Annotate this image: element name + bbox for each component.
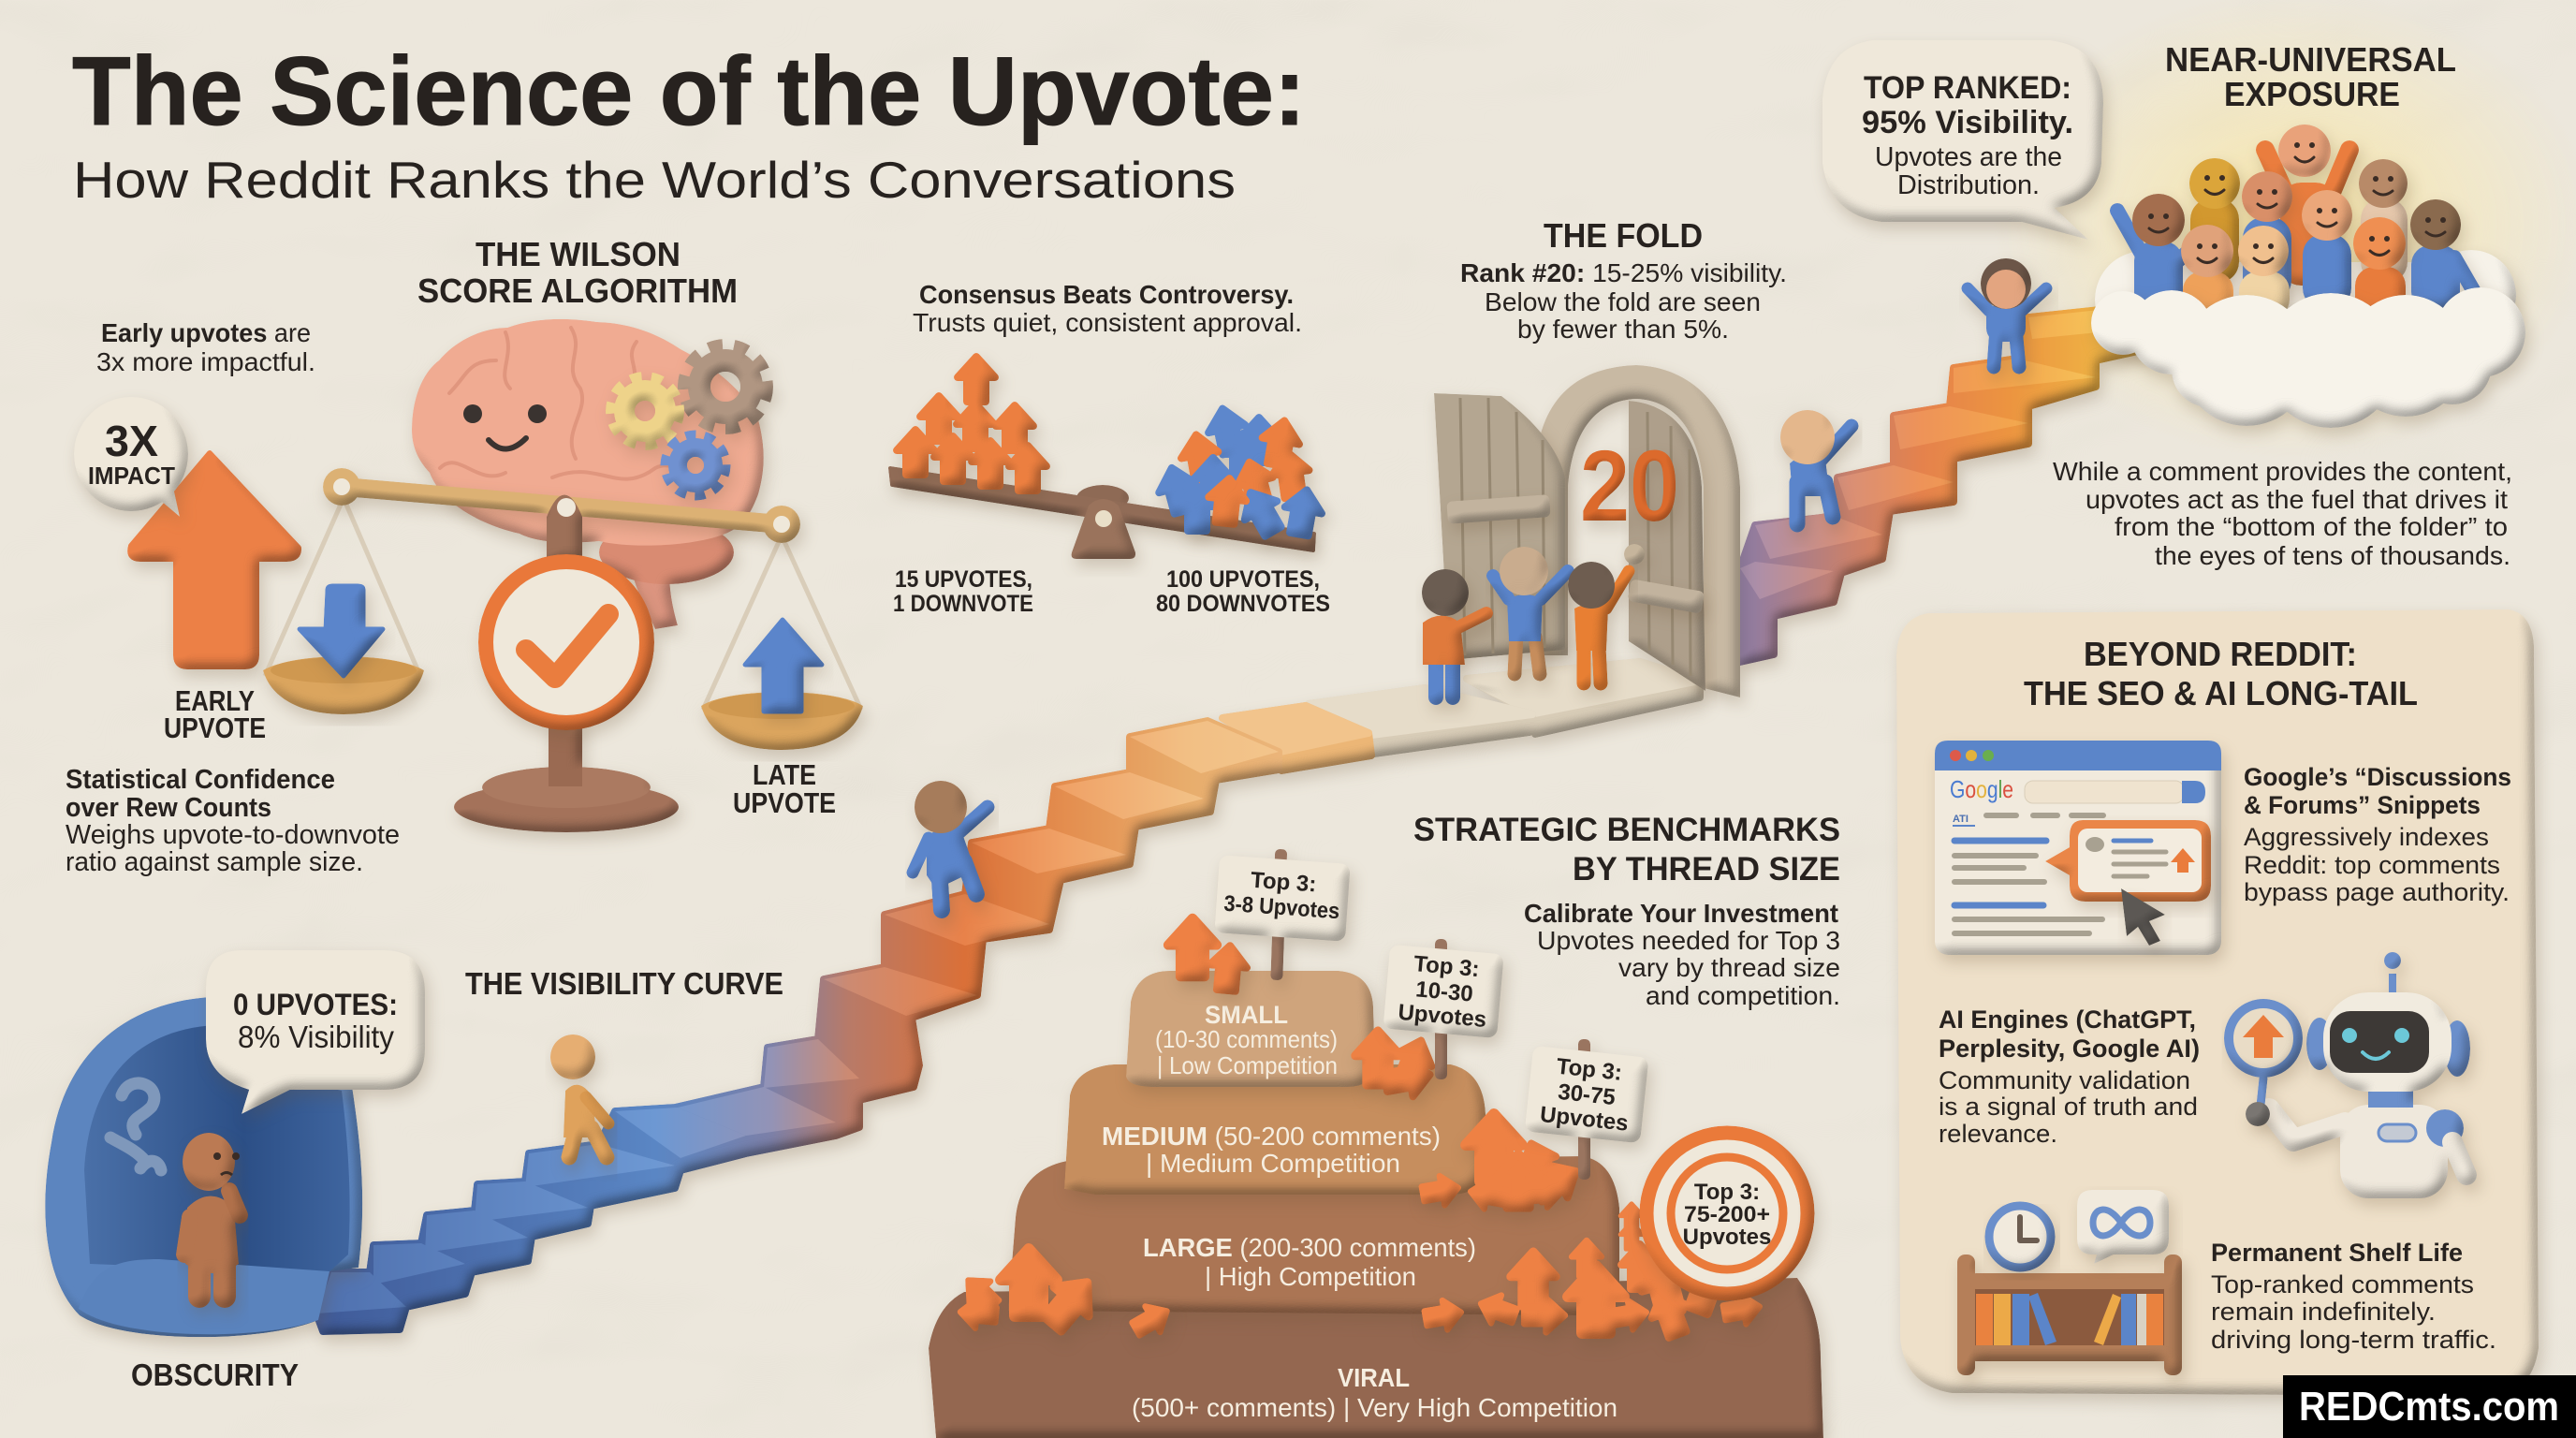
heading: near-universal exposure: NEAR-UNIVERSAL	[2165, 40, 2456, 79]
sign: large tier: Upvotes	[1539, 1102, 1630, 1137]
target: viral tier: Top 3:	[1694, 1180, 1760, 1205]
icon: check badge	[486, 562, 647, 723]
text: AI engines: Perplesity, Google AI)	[1939, 1034, 2200, 1063]
panel: strategic benchmarks text: vary by thread size	[1618, 953, 1840, 982]
sign: medium tier	[1383, 939, 1504, 1079]
panel: near universal exposure	[1822, 40, 2525, 570]
panel: strategic benchmarks text: BY THREAD SIZE	[1573, 851, 1840, 888]
stair body	[316, 721, 1279, 1331]
text: AI engines: relevance.	[1939, 1120, 2057, 1148]
icon: bookshelf with clock and infinity bubble	[1957, 1190, 2182, 1375]
icon: balance scale	[263, 468, 863, 832]
text: google snippets	[2244, 763, 2511, 906]
text: 20: 20	[1580, 429, 1679, 542]
callout: top ranked: TOP RANKED:	[1864, 70, 2071, 106]
icon: browser window: ATI	[1953, 814, 1969, 825]
text: comment fuel: from the “bottom of the folder” to	[2115, 512, 2508, 541]
figure: walker on stairs	[550, 1034, 608, 1157]
sign: medium tier: Top 3:	[1412, 951, 1481, 982]
text: google snippets: Google’s “Discussions	[2244, 763, 2511, 791]
label: 15 upvotes: 1 DOWNVOTE	[893, 591, 1033, 617]
crowd back row	[2189, 125, 2408, 286]
icon: stone arch and door	[1434, 365, 1740, 697]
stone tile near door	[1467, 662, 1700, 734]
text: statistical confidence: Statistical Confidence	[66, 765, 335, 795]
panel background	[1896, 609, 2539, 1396]
title: The Science of the Upvote:	[72, 37, 1306, 146]
heading: beyond reddit	[2024, 635, 2418, 712]
text: google snippets: & Forums” Snippets	[2244, 791, 2481, 819]
cloud back	[2095, 250, 2516, 348]
text: AI engines: AI Engines (ChatGPT,	[1939, 1005, 2196, 1034]
text: early upvotes are 3x more impactful: Early upvotes are	[101, 318, 311, 347]
figure: climber on upper stairs	[1780, 410, 1852, 524]
sign: large tier: Top 3:	[1556, 1054, 1623, 1086]
icon: up arrow in right pan	[745, 620, 822, 712]
figure: middle person at door	[1493, 547, 1568, 674]
icon: down arrow in left pan	[300, 586, 383, 676]
text: google snippets: Aggressively indexes	[2244, 823, 2489, 851]
text: early upvotes are 3x more impactful: 3x more impactful.	[96, 347, 315, 376]
text: comment fuel	[2053, 457, 2512, 570]
callout: top ranked: Distribution.	[1897, 170, 2040, 200]
target: viral tier	[1647, 1133, 1808, 1294]
panel: beyond reddit	[1896, 609, 2539, 1396]
icon: thinking figure	[183, 1133, 240, 1297]
title	[72, 37, 1306, 209]
heading: the fold: Rank #20: 15-25% visibility.	[1460, 258, 1787, 287]
sign: small tier	[1214, 849, 1351, 980]
label: 100 upvotes	[1156, 566, 1330, 617]
callout: 0 upvotes	[206, 950, 425, 1114]
sign: large tier	[1525, 1039, 1649, 1180]
heading: near-universal exposure	[2165, 40, 2456, 113]
icon: cloud	[2091, 287, 2525, 428]
sign: large tier: 30-75	[1557, 1079, 1617, 1110]
heading: the fold: by fewer than 5%.	[1517, 315, 1729, 344]
label: early upvote: EARLY	[175, 684, 255, 717]
panel: fold door	[1422, 216, 1852, 697]
icon: infinity speech bubble	[2077, 1190, 2169, 1264]
panel: obscurity cave	[45, 950, 425, 1392]
watermark	[2283, 1375, 2576, 1438]
tier: large	[1008, 1156, 1619, 1315]
target: viral tier: Upvotes	[1683, 1225, 1771, 1250]
tier: viral: (500+ comments) | Very High Competition	[1132, 1393, 1617, 1422]
heading: beyond reddit: BEYOND REDDIT:	[2084, 635, 2357, 673]
figure: climber mid stairs	[913, 781, 988, 910]
callout: 3X impact: 3X	[105, 417, 158, 465]
stone tile	[1309, 688, 1532, 754]
tier: small: (10-30 comments)	[1155, 1025, 1338, 1053]
label: 15 upvotes: 15 UPVOTES,	[895, 566, 1032, 593]
text: permanent shelf life: remain indefinitely.	[2211, 1298, 2436, 1326]
icon: mixed controversy arrows	[1153, 404, 1325, 541]
panel: consensus seesaw	[890, 280, 1330, 617]
glow behind cloud	[1994, 0, 2576, 459]
tier: medium: MEDIUM (50-200 comments)	[1102, 1122, 1441, 1151]
seesaw	[890, 468, 1314, 559]
tier: large: | High Competition	[1205, 1262, 1416, 1291]
heading: the fold: Below the fold are seen	[1485, 287, 1761, 316]
icon: cursor	[2121, 888, 2165, 946]
figure: right person at door	[1568, 562, 1629, 683]
panel: pyramid of thread sizes	[929, 849, 1823, 1438]
callout: 0 upvotes: 0 UPVOTES:	[233, 988, 398, 1021]
text: early upvotes are 3x more impactful	[96, 318, 315, 376]
text: statistical confidence	[66, 765, 400, 877]
tier: small: | Low Competition	[1157, 1051, 1338, 1079]
tier: small: SMALL	[1205, 1001, 1288, 1029]
icon: browser window	[1935, 741, 2221, 955]
icon: big orange up arrow	[130, 453, 299, 667]
label: 15 upvotes	[893, 566, 1033, 617]
heading: Wilson: THE WILSON	[476, 235, 681, 273]
tier: medium	[1064, 1064, 1486, 1195]
heading: near-universal exposure: EXPOSURE	[2224, 75, 2400, 113]
callout: 3X impact	[74, 397, 188, 517]
text: consensus beats controversy: Consensus Beats Controversy.	[919, 280, 1294, 309]
label: 100 upvotes: 100 UPVOTES,	[1166, 566, 1320, 593]
icon: orange consensus arrows	[897, 357, 1046, 491]
heading: the fold: THE FOLD	[1544, 216, 1703, 255]
tier: viral: VIRAL	[1338, 1363, 1410, 1392]
label: 100 upvotes: 80 DOWNVOTES	[1156, 591, 1330, 617]
sign: small tier: Top 3:	[1250, 868, 1317, 897]
text: comment fuel: the eyes of tens of thousands.	[2155, 541, 2510, 570]
text: statistical confidence: Weighs upvote-to-downvote	[66, 820, 400, 850]
callout: 3X impact: IMPACT	[88, 462, 175, 490]
text: google snippets: bypass page authority.	[2244, 878, 2510, 906]
label: obscurity: OBSCURITY	[131, 1357, 299, 1392]
sign: medium tier: Upvotes	[1397, 1000, 1487, 1033]
callout: top ranked	[1822, 40, 2103, 240]
panel: strategic benchmarks text: STRATEGIC BENCHMARKS	[1413, 812, 1840, 848]
icon: highlighted snippet callout	[2045, 820, 2211, 902]
icon: browser window: Google	[1950, 775, 2013, 803]
heading: Wilson: SCORE ALGORITHM	[417, 271, 738, 310]
title: How Reddit Ranks the World’s Conversations	[73, 151, 1236, 209]
text: permanent shelf life	[2211, 1239, 2496, 1354]
heading: Wilson	[417, 235, 738, 310]
panel: strategic benchmarks text: and competition.	[1646, 981, 1840, 1010]
icon: clock	[1989, 1206, 2051, 1268]
faces: crowd	[2148, 142, 2446, 262]
stair treads	[316, 721, 1279, 1313]
icon: right pan	[701, 692, 863, 750]
icon: books	[1976, 1293, 2163, 1345]
label: the visibility curve: THE VISIBILITY CURVE	[465, 966, 783, 1001]
icon: upvote arrows on tiers	[958, 918, 1763, 1342]
text: permanent shelf life: Top-ranked comments	[2211, 1270, 2474, 1299]
text: permanent shelf life: driving long-term traffic.	[2211, 1326, 2496, 1354]
text: AI engines: is a signal of truth and	[1939, 1093, 2198, 1121]
tier: viral	[929, 1278, 1823, 1438]
callout: top ranked: 95% Visibility.	[1862, 105, 2073, 140]
label: late upvote: LATE	[753, 758, 816, 791]
label: late upvote: UPVOTE	[733, 786, 836, 819]
figure: left person at door	[1422, 569, 1486, 697]
tier: small	[1126, 971, 1375, 1087]
icon: blue cave	[45, 997, 362, 1337]
text: consensus beats controversy: Trusts quiet, consistent approval.	[913, 308, 1302, 337]
icon: left pan	[263, 656, 424, 714]
panel: strategic benchmarks text: Calibrate Your Investment	[1524, 899, 1838, 928]
orange tile	[1222, 706, 1371, 770]
text: AI engines	[1939, 1005, 2200, 1148]
panel: strategic benchmarks text	[1413, 812, 1840, 1010]
tier: medium: | Medium Competition	[1146, 1149, 1400, 1178]
panel: Wilson score algorithm	[263, 235, 863, 832]
label: early upvote: UPVOTE	[164, 712, 266, 744]
label: early upvote	[164, 684, 266, 744]
heading: the fold	[1460, 216, 1787, 344]
text: AI engines: Community validation	[1939, 1066, 2190, 1094]
text: statistical confidence: over Rew Counts	[66, 793, 271, 823]
face: worried	[213, 1152, 240, 1175]
text: comment fuel: upvotes act as the fuel that drives it	[2086, 485, 2508, 514]
panel: upper staircase	[1740, 308, 2174, 662]
text: comment fuel: While a comment provides the content,	[2053, 457, 2512, 486]
callout: top ranked: Upvotes are the	[1875, 142, 2062, 172]
crowd front row	[2181, 217, 2406, 318]
panel: early upvote callout	[66, 318, 400, 877]
icon: robot with magnifier	[2229, 952, 2470, 1198]
label: late upvote	[733, 758, 836, 819]
crowd middle row	[2117, 171, 2476, 316]
panel: visibility curve lower staircase	[316, 662, 1700, 1331]
target: viral tier: 75-200+	[1684, 1202, 1770, 1227]
text: permanent shelf life: Permanent Shelf Life	[2211, 1239, 2463, 1267]
callout: 0 upvotes: 8% Visibility	[238, 1020, 394, 1054]
sign: small tier: 3-8 Upvotes	[1223, 891, 1340, 924]
sign: medium tier: 10-30	[1414, 976, 1474, 1007]
panel: strategic benchmarks text: Upvotes needed for Top 3	[1537, 926, 1840, 955]
heading: beyond reddit: THE SEO & AI LONG-TAIL	[2024, 674, 2418, 712]
text: google snippets: Reddit: top comments	[2244, 851, 2500, 879]
text: statistical confidence: ratio against sample size.	[66, 847, 363, 877]
tier: large: LARGE (200-300 comments)	[1143, 1233, 1476, 1262]
figure: person at top of stairs	[1968, 258, 2046, 367]
icon: smiling brain with gears	[412, 319, 767, 629]
text: consensus beats controversy	[913, 280, 1302, 337]
